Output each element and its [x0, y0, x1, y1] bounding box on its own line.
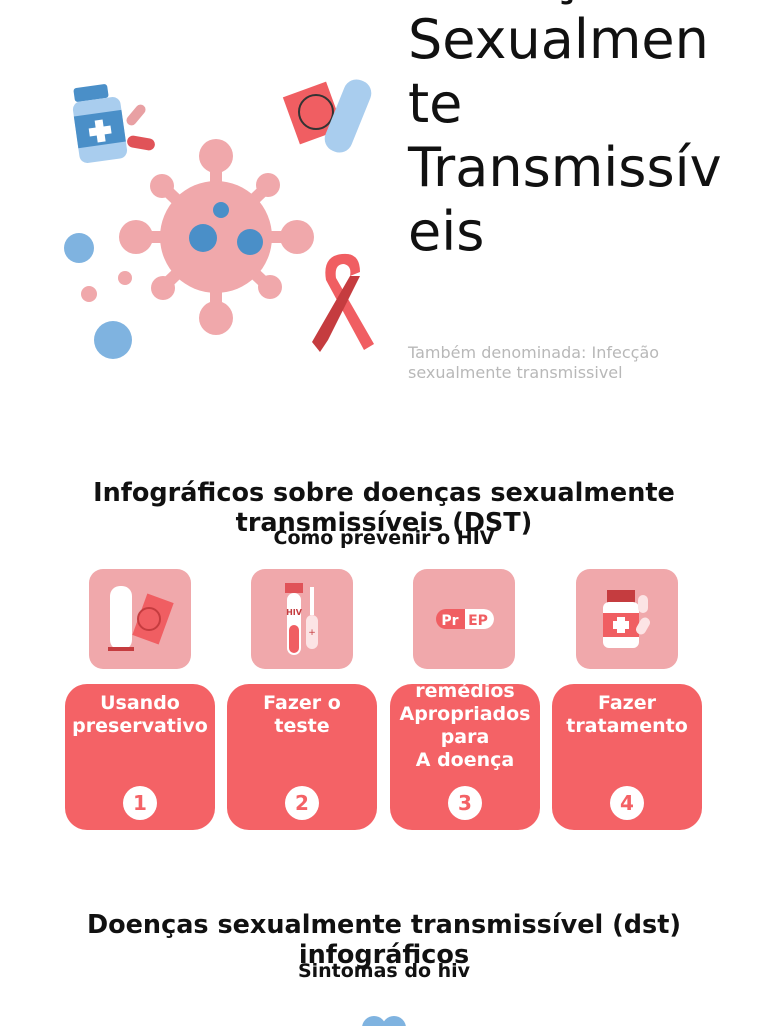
icon: red ribbon: [312, 254, 374, 352]
icon box: PrEP: [413, 569, 515, 669]
title: eis: [408, 200, 484, 263]
icon: blue heart partial: [362, 1016, 406, 1026]
icon: virus: [64, 139, 314, 359]
title: Sexualmen: [408, 8, 709, 71]
card 4: tratamento: [566, 715, 688, 737]
card 1: 1: [133, 791, 147, 815]
subheading: sintomas: Sintomas do hiv: [298, 960, 470, 982]
subheading: como prevenir: Como prevenir o HIV: [274, 527, 494, 549]
title: te: [408, 72, 462, 135]
card 2: Fazer o: [263, 692, 341, 714]
card 1: [65, 684, 215, 830]
icon box: HIV test: [251, 569, 353, 669]
card 3: A doença: [416, 749, 514, 771]
card 4: [552, 684, 702, 830]
icon: condom: [283, 76, 375, 156]
heading: section 2: [87, 910, 681, 970]
heading: section 2: infográficos: [299, 940, 469, 970]
icon box: PrEP: EP: [468, 613, 488, 629]
card 2: 2: [295, 791, 309, 815]
heading: section 1: [93, 478, 675, 538]
card 4: Fazer: [598, 692, 656, 714]
icon box: HIV test: HIV: [286, 608, 303, 617]
title: [408, 0, 722, 263]
icon: medicine bottle: [72, 84, 156, 164]
card 2: [227, 684, 377, 830]
icon box: medicine: [576, 569, 678, 669]
card 3: [390, 684, 540, 830]
icon box: PrEP: Pr: [441, 613, 459, 629]
illustration: virus and icons: [64, 80, 374, 359]
title: Transmissív: [408, 136, 722, 199]
icon box: condom: [89, 569, 191, 669]
icon box: HIV test: +: [308, 628, 316, 638]
card 3: Apropriados: [400, 703, 530, 725]
subtitle: Também denominada: Infecção sexualmente transmissivel: [408, 343, 659, 382]
card 2: teste: [274, 715, 330, 737]
heading: section 1: transmissíveis (DST): [236, 508, 532, 538]
card 3: para: [441, 726, 489, 748]
card 3: 3: [458, 791, 472, 815]
card 1: Usando: [100, 692, 180, 714]
heading: section 1: Infográficos sobre doenças sexualmente: [93, 478, 675, 508]
heading: section 2: Doenças sexualmente transmissível (dst): [87, 910, 681, 940]
card 4: 4: [620, 791, 634, 815]
card 1: preservativo: [72, 715, 208, 737]
